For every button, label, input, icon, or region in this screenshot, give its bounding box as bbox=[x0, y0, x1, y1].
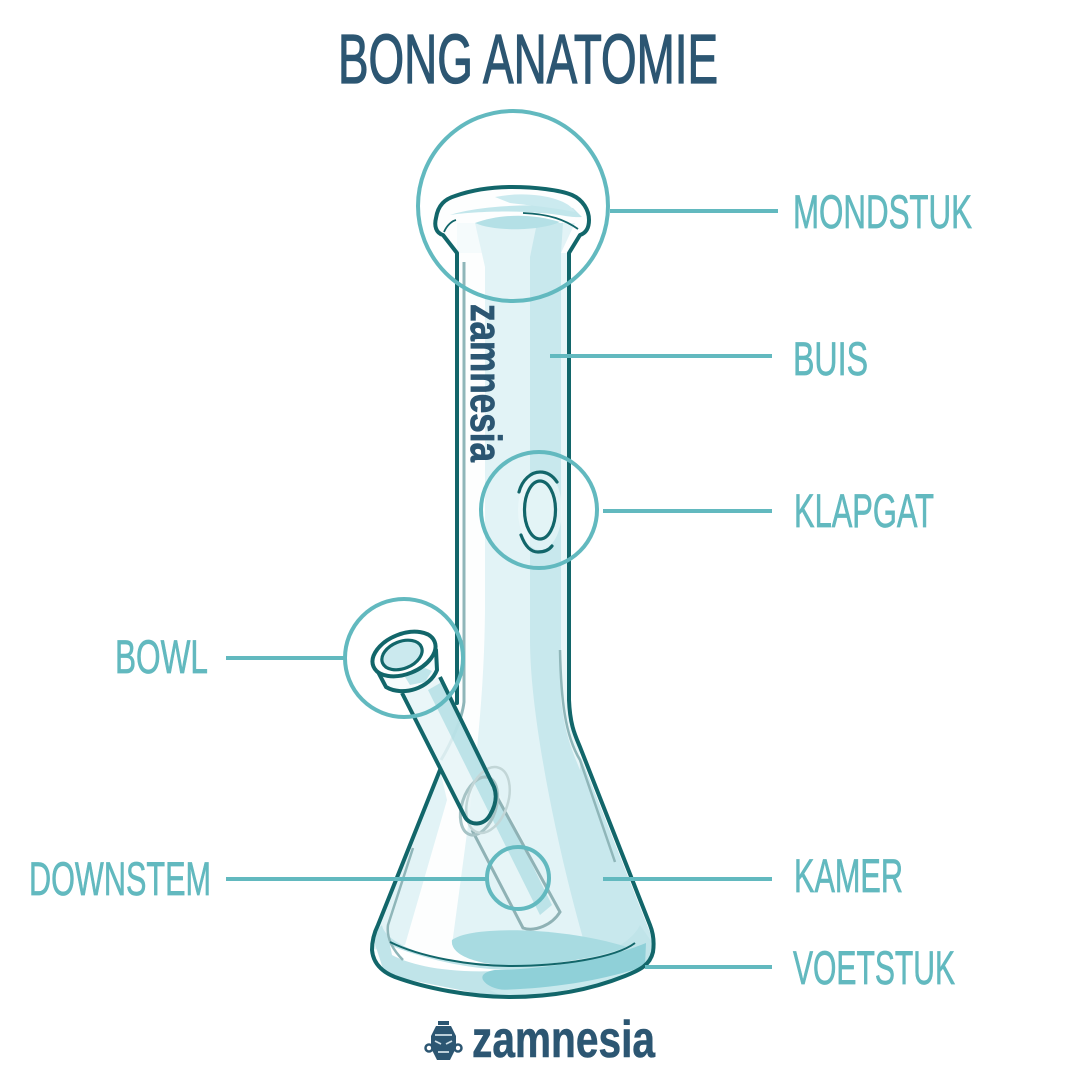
callout: bowl: BOWL bbox=[115, 630, 208, 683]
callout: buis: BUIS bbox=[793, 332, 868, 385]
callout: klapgat bbox=[481, 452, 934, 568]
callout: downstem bbox=[29, 847, 549, 909]
callout: kamer: KAMER bbox=[794, 849, 903, 902]
base curve bbox=[390, 942, 635, 966]
glass outline bbox=[372, 187, 654, 997]
inner glass lines bbox=[388, 262, 615, 960]
callout: mondstuk: MONDSTUK bbox=[793, 185, 972, 238]
callout: downstem: DOWNSTEM bbox=[29, 852, 211, 905]
title: BONG ANATOMIE bbox=[338, 20, 718, 98]
bong branding: zamnesia bbox=[461, 304, 510, 462]
bong illustration bbox=[360, 180, 660, 1000]
carb hole bbox=[518, 470, 562, 552]
callout: klapgat: KLAPGAT bbox=[794, 484, 934, 537]
mouth inner rim bbox=[444, 213, 578, 232]
bowl bbox=[366, 623, 442, 691]
icon: tribal mask bbox=[426, 1021, 462, 1060]
callout: voetstuk: VOETSTUK bbox=[793, 941, 955, 994]
wordmark: zamnesia bbox=[472, 1011, 656, 1069]
glass tints bbox=[360, 180, 660, 1000]
callout: mondstuk bbox=[418, 111, 972, 301]
downstem bbox=[402, 677, 560, 929]
callout: bowl bbox=[115, 599, 463, 717]
footer logo bbox=[426, 1011, 656, 1069]
